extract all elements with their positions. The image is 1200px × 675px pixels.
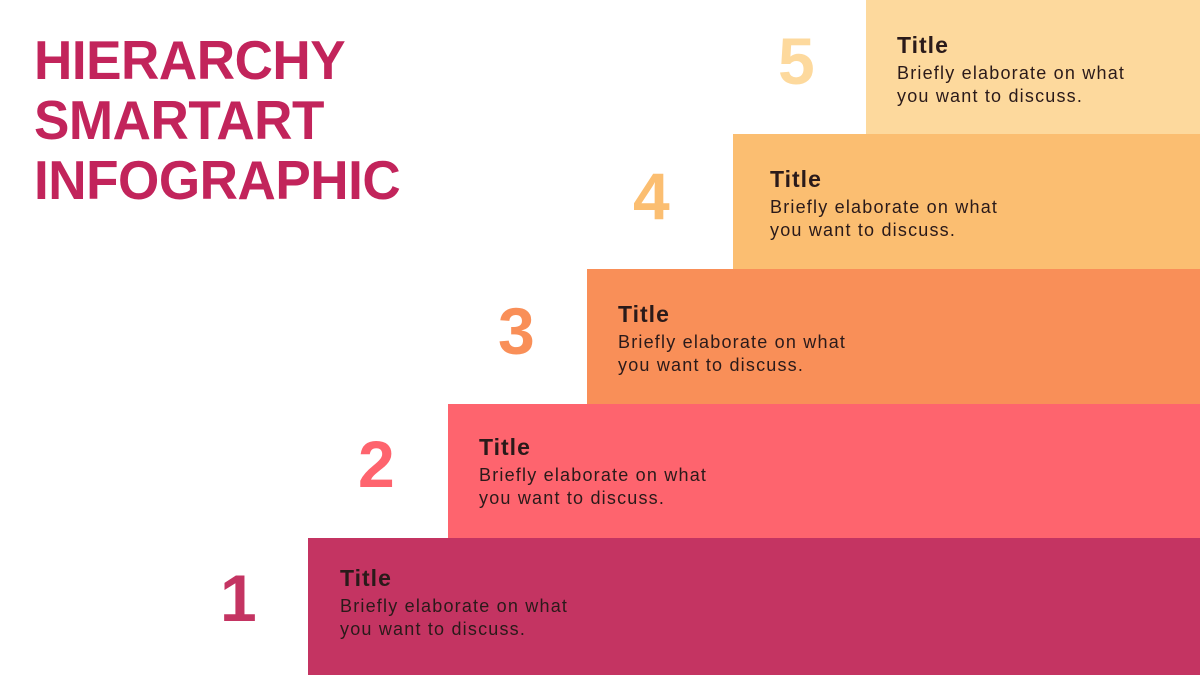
title [34, 29, 400, 211]
number 3: 3 [498, 294, 535, 368]
text 4: you want to discuss. [770, 220, 956, 240]
text 4: Briefly elaborate on what [770, 197, 998, 217]
text 3 [618, 301, 846, 375]
bar 3 [587, 269, 1200, 404]
text 3: Briefly elaborate on what [618, 332, 846, 352]
text 3: you want to discuss. [618, 355, 804, 375]
text 5: you want to discuss. [897, 86, 1083, 106]
text 1: you want to discuss. [340, 619, 526, 639]
bar 1 [308, 538, 1200, 675]
number 5: 5 [778, 24, 815, 98]
text 1: Title [340, 565, 392, 591]
bar 4 [733, 134, 1200, 269]
text 2: Briefly elaborate on what [479, 465, 707, 485]
number 2: 2 [358, 427, 395, 501]
number 1: 1 [220, 561, 257, 635]
text 4: Title [770, 166, 822, 192]
title: HIERARCHY [34, 29, 345, 91]
bar 2 [448, 404, 1200, 538]
text 1: Briefly elaborate on what [340, 596, 568, 616]
text 2 [479, 434, 707, 508]
text 1 [340, 565, 568, 639]
title: SMARTART [34, 89, 324, 151]
text 5: Briefly elaborate on what [897, 63, 1125, 83]
bar 5 [866, 0, 1200, 134]
text 5 [897, 32, 1125, 106]
title: INFOGRAPHIC [34, 149, 400, 211]
number 4: 4 [633, 159, 670, 233]
text 5: Title [897, 32, 949, 58]
text 2: Title [479, 434, 531, 460]
text 3: Title [618, 301, 670, 327]
text 2: you want to discuss. [479, 488, 665, 508]
text 4 [770, 166, 998, 240]
